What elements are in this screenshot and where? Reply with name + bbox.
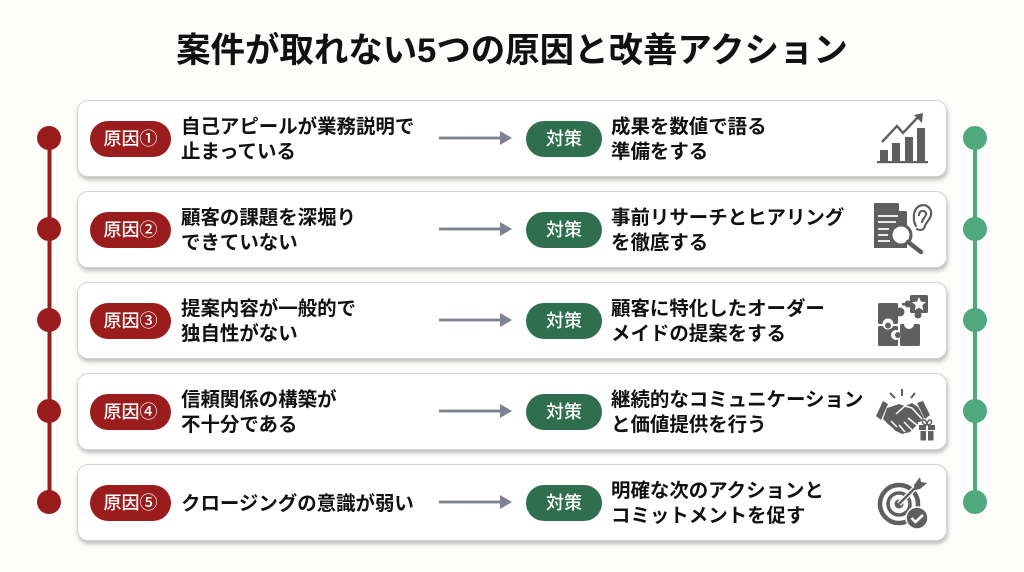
cause text 3 [181, 298, 356, 345]
cause text 1 [181, 116, 414, 163]
action text 5: 明確な次のアクションと [611, 480, 824, 502]
cause text 5: クロージングの意識が弱い [181, 493, 414, 515]
action badge 2: 対策 [546, 220, 582, 240]
action text 3: メイドの提案をする [611, 323, 786, 345]
panel: row 2 [77, 191, 947, 268]
icon: target with check [878, 477, 928, 528]
action text 3: 顧客に特化したオーダー [611, 298, 825, 320]
timeline: actions [963, 126, 987, 514]
cause badge 3: 原因③ [104, 311, 158, 331]
action text 2 [611, 207, 844, 254]
action text 4 [611, 389, 863, 436]
cause text 1: 止まっている [181, 141, 296, 163]
cause badge 2: 原因② [104, 220, 158, 240]
panel: row 3 [77, 282, 947, 359]
cause text 2: できていない [181, 232, 298, 254]
action badge 4: 対策 [546, 402, 582, 422]
timeline: causes [37, 126, 61, 514]
action badge 5 [526, 485, 602, 521]
panel: row 5 [77, 464, 947, 541]
cause badge 1 [90, 121, 171, 157]
cause text 3: 独自性がない [181, 323, 298, 345]
action text 4: と価値提供を行う [611, 414, 767, 436]
cause text 1: 自己アピールが業務説明で [181, 116, 414, 138]
cause badge 4 [90, 394, 171, 430]
action text 1: 準備をする [611, 141, 708, 163]
cause text 4: 信頼関係の構築が [181, 389, 337, 411]
arrow 2 [439, 222, 512, 236]
action badge 1: 対策 [546, 129, 582, 149]
action text 2: を徹底する [611, 232, 708, 254]
cause text 4 [181, 389, 337, 436]
icon: document, magnifier and ear [874, 203, 932, 254]
cause text 2 [181, 207, 356, 254]
arrow 1 [439, 131, 512, 145]
action text 5: コミットメントを促す [611, 505, 805, 527]
icon: growth chart [877, 113, 928, 164]
action text 4: 継続的なコミュニケーション [611, 389, 863, 411]
cause text 4: 不十分である [181, 414, 297, 436]
cause badge 5: 原因⑤ [104, 493, 158, 513]
action text 1: 成果を数値で語る [611, 116, 767, 138]
action badge 4 [526, 394, 602, 430]
action text 2: 事前リサーチとヒアリング [611, 207, 844, 229]
cause badge 2 [90, 212, 171, 248]
action badge 2 [526, 212, 602, 248]
cause text 3: 提案内容が一般的で [181, 298, 356, 320]
panel: row 1 [77, 100, 947, 177]
cause badge 1: 原因① [104, 129, 158, 149]
action text 5 [611, 480, 824, 527]
action badge 3 [526, 303, 602, 339]
title: 案件が取れない5つの原因と改善アクション [176, 32, 848, 70]
cause badge 4: 原因④ [104, 402, 158, 422]
icon: handshake with gift [876, 389, 935, 440]
action badge 5: 対策 [546, 493, 582, 513]
icon: puzzle with star [878, 295, 928, 346]
action badge 1 [526, 121, 602, 157]
arrow 4 [439, 404, 512, 418]
arrow 3 [439, 313, 512, 327]
panel: row 4 [77, 373, 947, 450]
cause text 2: 顧客の課題を深堀り [181, 207, 356, 229]
action text 3 [611, 298, 825, 345]
action text 1 [611, 116, 767, 163]
cause badge 3 [90, 303, 171, 339]
arrow 5 [439, 495, 512, 509]
cause badge 5 [90, 485, 171, 521]
action badge 3: 対策 [546, 311, 582, 331]
